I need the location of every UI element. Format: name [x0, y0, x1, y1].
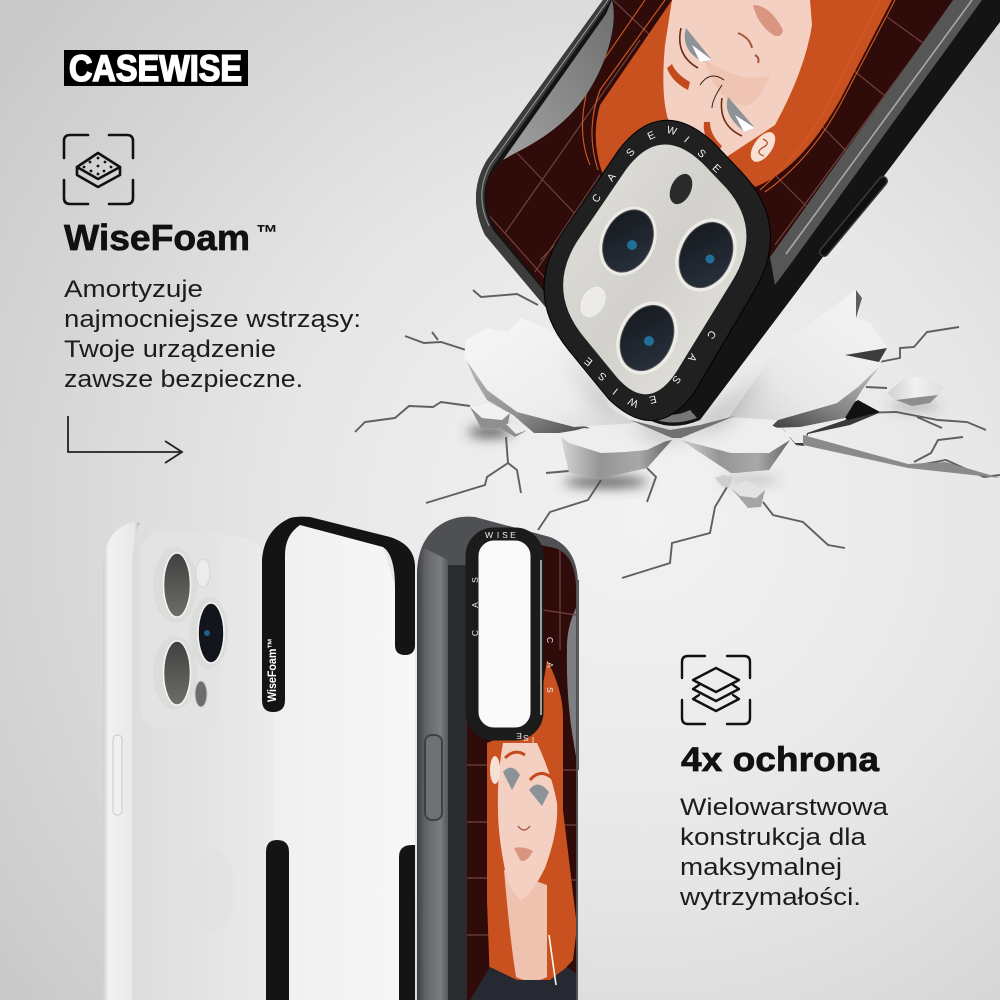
- ring letters: C: [545, 637, 555, 643]
- centre-right slab: [681, 440, 790, 473]
- foam strip bottom left: [266, 840, 289, 1000]
- lens 1: [588, 197, 668, 285]
- camera lenses: [153, 547, 228, 710]
- right slab: [770, 367, 879, 428]
- eyes: [680, 28, 755, 136]
- camera plate: [563, 145, 746, 394]
- small rock left: [470, 402, 526, 437]
- artwork: [467, 530, 580, 1000]
- text block: WiseFoam description: zawsze bezpieczne.: [64, 366, 303, 393]
- side button: [824, 181, 883, 252]
- ring letters: S: [624, 146, 638, 159]
- text block: WiseFoam description: [64, 276, 361, 393]
- small rocks bottom: [715, 475, 765, 508]
- phone: white back: [103, 522, 273, 1000]
- dark inner band: [448, 565, 468, 1000]
- icon: foam: [64, 135, 133, 204]
- ring letters: S: [470, 577, 480, 583]
- ring letters: E: [710, 162, 723, 175]
- WiseFoam layer: [262, 517, 415, 1000]
- ears: [490, 756, 500, 784]
- side button: [425, 735, 442, 820]
- text block: protection description: konstrukcja dla: [680, 824, 866, 851]
- central gap: [630, 416, 735, 438]
- camera plateau: [140, 532, 220, 728]
- ring letters: S: [523, 733, 529, 743]
- text block: WiseFoam description: najmocniejsze wstrząsy:: [64, 306, 361, 333]
- phone body: [103, 522, 273, 1000]
- slab shadows: [468, 403, 941, 487]
- lips: [514, 847, 533, 861]
- hair: [596, 0, 892, 187]
- icon: layers: [682, 656, 750, 724]
- ring letters: E: [582, 354, 595, 368]
- ring letters: C: [590, 192, 604, 205]
- ring letters: W: [665, 124, 678, 138]
- ring letters: I: [681, 134, 691, 145]
- ring letters: W: [485, 530, 493, 540]
- right rock: [887, 377, 944, 405]
- side band: [417, 548, 448, 1000]
- ring letters: S: [669, 373, 683, 386]
- foam strip top: [262, 517, 415, 712]
- eyebrows: [667, 64, 690, 90]
- ring letters: A: [605, 171, 619, 184]
- phone: tilted case striking wall: [470, 0, 1000, 426]
- ring letters: A: [470, 602, 480, 608]
- side button: [113, 735, 122, 815]
- text block: protection description: [679, 794, 888, 911]
- ring letters: E: [646, 129, 657, 143]
- centre-left slab: [561, 437, 672, 478]
- nose: [738, 33, 759, 63]
- ring letters: C: [704, 328, 718, 341]
- nose: [518, 826, 530, 830]
- ring letters: I: [611, 386, 621, 397]
- case body: [417, 517, 578, 1000]
- ring letters: A: [545, 662, 555, 668]
- text block: WiseFoam description: Twoje urządzenie: [64, 336, 276, 363]
- text block: protection description: maksymalnej: [680, 854, 842, 881]
- neck: [504, 870, 547, 981]
- gray wave panel: [503, 0, 614, 160]
- microphone dot: [665, 170, 697, 208]
- text block: protection description: Wielowarstwowa: [680, 794, 888, 821]
- ring letters: I: [532, 735, 534, 745]
- camera ring: [544, 120, 770, 421]
- heading: WiseFoam: WiseFoam: [64, 217, 250, 258]
- ring letters: [470, 530, 555, 745]
- face: [498, 743, 557, 900]
- text block: protection description: wytrzymałości.: [679, 884, 861, 911]
- side frame: [103, 522, 140, 1000]
- foam strip bottom right: [399, 845, 415, 1000]
- ring letters: E: [510, 530, 516, 540]
- ring letters: A: [685, 351, 699, 364]
- gray wave: [566, 608, 576, 756]
- lens 3: [605, 291, 689, 385]
- lips: [753, 5, 783, 36]
- ear: [750, 132, 776, 162]
- ring letters: C: [470, 630, 480, 636]
- wave highlight: [577, 580, 579, 770]
- strip label: WiseFoam™: [265, 638, 279, 702]
- grid: [487, 0, 940, 295]
- foam sheet: [273, 525, 415, 1000]
- ring letters: S: [695, 147, 708, 160]
- face: [663, 0, 812, 158]
- ring letters: S: [596, 369, 609, 383]
- ring letters: I: [497, 530, 499, 540]
- ring letters: S: [545, 687, 555, 693]
- flash: [574, 281, 612, 323]
- grid: [467, 550, 577, 935]
- shirt: [470, 967, 580, 1000]
- eyes: [503, 752, 552, 806]
- left rim: [476, 0, 611, 310]
- ring letters: W: [626, 395, 640, 410]
- brand logo: CASEWISE: [69, 48, 242, 89]
- heading: 4x ochrona: 4x ochrona: [681, 741, 880, 779]
- ring letters: S: [502, 530, 508, 540]
- left slab: [464, 355, 590, 433]
- right translucent band: [770, 0, 982, 285]
- lens 2: [664, 208, 748, 302]
- faint logo: [191, 848, 235, 932]
- text block: WiseFoam description: Amortyzuje: [64, 276, 203, 303]
- phone contact shadow: [565, 350, 770, 440]
- ring letters: E: [516, 731, 522, 741]
- case body: [476, 0, 1000, 426]
- ring letters: [582, 124, 723, 410]
- crack lines: [355, 290, 1000, 578]
- trademark mark: ™: [256, 220, 278, 245]
- bottom translucent corner: [625, 392, 697, 422]
- arrow: [68, 416, 182, 463]
- hair: [487, 660, 577, 985]
- ring letters: E: [648, 392, 658, 406]
- camera ring: [472, 534, 537, 734]
- artwork on case: [486, 0, 953, 287]
- ring glint: [540, 560, 542, 715]
- phone: case with artwork: [417, 517, 580, 1000]
- cracked wall: [355, 290, 1000, 578]
- dark chasm right: [778, 407, 879, 446]
